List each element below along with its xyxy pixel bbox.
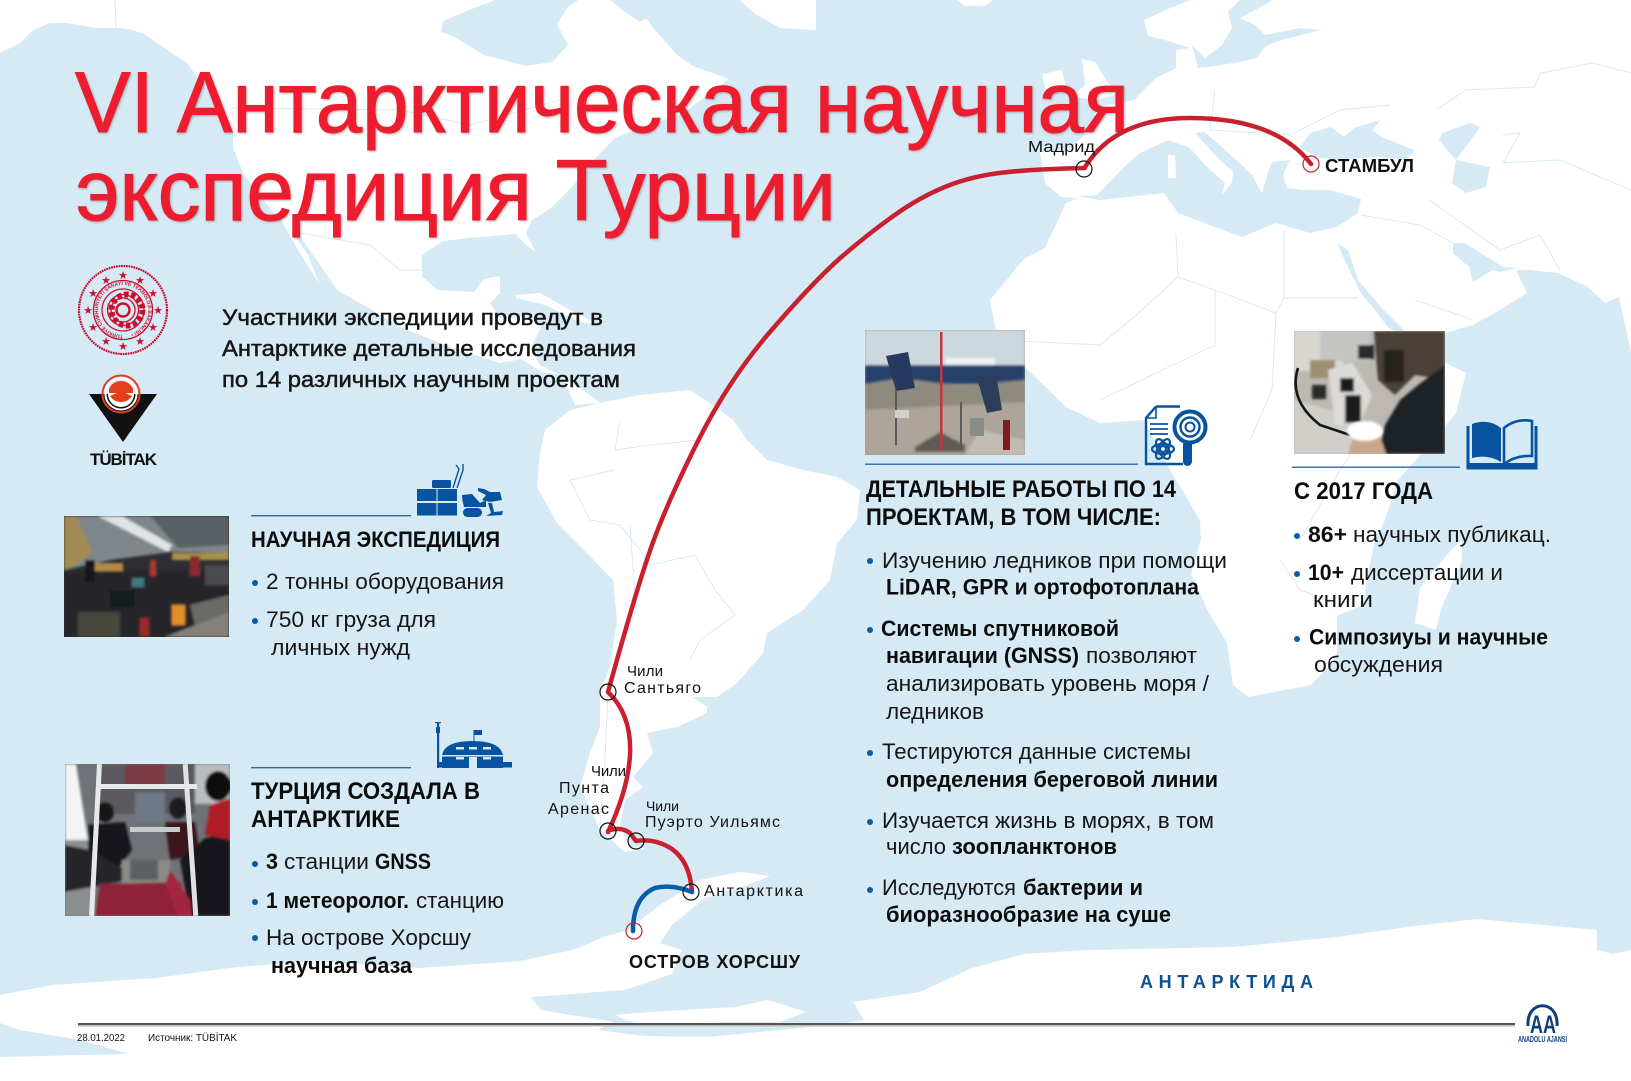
bullet list: ледников [886, 699, 984, 724]
land: Eurasia and Africa [990, 0, 1631, 697]
bullet list [252, 849, 504, 978]
bullet list: 3 [266, 849, 278, 874]
route [600, 118, 1319, 939]
bullet list: 86+ [1308, 522, 1347, 547]
logo: ministry seal [78, 264, 168, 356]
bullet list: Изучается жизнь в морях, в том [882, 808, 1214, 833]
bullet list: GNSS [375, 849, 431, 874]
marker: Madrid [1076, 161, 1092, 177]
source: Источник: TÜBİTAK [148, 1031, 237, 1044]
heading: АНТАРКТИКЕ [251, 806, 400, 833]
map labels: Чили [646, 798, 679, 814]
map labels: Аренас [548, 801, 609, 818]
land: Iceland [957, 0, 993, 6]
route: Santiago to Punta Arenas [608, 692, 630, 832]
bullet list: На острове Хорсшу [266, 925, 471, 950]
rule [251, 767, 411, 768]
land: Madagascar [1415, 540, 1462, 630]
border lines [115, 0, 1631, 825]
date: 28.01.2022 [77, 1033, 125, 1044]
logo: ministry seal: ★ [148, 321, 158, 334]
route: Punta Arenas to Antarctica [608, 829, 692, 892]
panel: since 2017 [1292, 331, 1551, 677]
marker: Santiago [600, 684, 616, 700]
title [75, 55, 1129, 239]
bullet list: навигации (GNSS) [886, 643, 1079, 668]
heading: ДЕТАЛЬНЫЕ РАБОТЫ ПО 14 [866, 476, 1177, 503]
heading: ПРОЕКТАМ, В ТОМ ЧИСЛЕ: [866, 504, 1161, 531]
heading: ТУРЦИЯ СОЗДАЛА В [251, 778, 480, 805]
logo: Anadolu Agency: ANADOLU AJANSI [1518, 1035, 1567, 1044]
sea: Ungava strait [610, 0, 655, 22]
logo: ministry seal: TÜRKİYE CUMHURİYETİ SANAYİ VE TEKNOLOJİ BAKANLIĞI • [94, 281, 152, 338]
logo: ministry seal: ★ [88, 287, 98, 300]
land: North America [0, 0, 729, 405]
intro text [222, 305, 636, 392]
photo: solar panels station [865, 330, 1025, 455]
bullet list: зоопланктонов [952, 834, 1117, 859]
land: Great Britain [1071, 59, 1123, 100]
title: экспедиция Турции [76, 143, 836, 239]
photo: expedition members [65, 764, 231, 916]
bullet list: научная база [271, 953, 413, 978]
heading [866, 476, 1177, 531]
map labels [548, 139, 1414, 992]
intro text: по 14 различных научным проектам [222, 367, 620, 392]
bullet list: число [886, 834, 946, 859]
land: Cuba [516, 293, 600, 325]
map labels: Чили [591, 763, 626, 780]
marker: Antarctica [683, 884, 699, 900]
bullet list: Системы спутниковой [881, 616, 1119, 641]
logo: ministry seal: ★ [88, 321, 98, 334]
logo: ministry seal: ★ [118, 340, 128, 353]
logo: TÜBİTAK: TÜBİTAK [90, 450, 158, 469]
land: Greenland tip [740, 0, 816, 30]
bullet list [252, 569, 504, 660]
bullet list: 1 метеоролог. [266, 888, 409, 913]
map labels: Мадрид [1028, 139, 1096, 156]
bullet list [867, 548, 1227, 927]
bullet list: определения береговой линии [886, 767, 1218, 792]
logo: ministry seal: ★ [101, 274, 111, 287]
bullet list: Симпозиуы и научные [1309, 624, 1548, 650]
heading: С 2017 ГОДА [1294, 478, 1433, 505]
map labels: ОСТРОВ ХОРСШУ [629, 952, 801, 972]
icon: boxes and snowmobile [417, 464, 503, 517]
land: Mediterranean islands [1168, 155, 1176, 178]
intro text: Участники экспедиции проведут в [222, 305, 603, 330]
bullet list: станцию [416, 888, 504, 913]
sea: Mediterranean [1078, 132, 1361, 237]
intro text: Антарктике детальные исследования [222, 336, 636, 361]
sea: Red Sea [1337, 243, 1412, 338]
bullet list: личных нужд [271, 635, 410, 660]
bullet list: Исследуются [882, 875, 1016, 900]
map labels: АНТАРКТИДА [1140, 972, 1313, 992]
bullet list: диссертации и [1351, 560, 1503, 585]
panel: scientific expedition [64, 464, 504, 660]
photo: researcher at microscope [1294, 331, 1445, 454]
bullet list: LiDAR, GPR и ортофотоплана [886, 574, 1200, 600]
route: Madrid to Santiago [608, 168, 1085, 692]
logo: ministry seal: ★ [135, 274, 145, 287]
bullet list: Тестируются данные системы [882, 739, 1191, 764]
icon: document and magnifier [1146, 406, 1206, 466]
sea: Caspian [1439, 123, 1490, 193]
map labels: Сантьяго [624, 680, 701, 697]
bullet list: биоразнообразие на суше [886, 902, 1171, 927]
sea: Black Sea [1300, 120, 1415, 160]
land: ice shelf island [614, 1000, 806, 1025]
heading [251, 778, 480, 833]
sea: Baltic [1192, 0, 1320, 68]
heading: НАУЧНАЯ ЭКСПЕДИЦИЯ [251, 527, 500, 552]
panel: detailed works [865, 330, 1227, 927]
bullet list: Изучению ледников при помощи [882, 548, 1227, 573]
route: Antarctica to Horseshoe Island [633, 887, 692, 931]
logo: Anadolu Agency: AA [1530, 1011, 1556, 1039]
bullet list: 2 тонны оборудования [266, 569, 504, 594]
bullet list: книги [1313, 587, 1373, 612]
sea: Hudson Bay [441, 0, 578, 66]
icon: book [1468, 420, 1536, 468]
bullet list [1294, 522, 1551, 677]
bullet list: бактерии и [1023, 875, 1143, 900]
map labels: Пунта [559, 780, 609, 797]
panel: Turkey in Antarctica [65, 722, 512, 978]
logo: ministry seal: ★ [118, 269, 128, 282]
bullet list: анализировать уровень моря / [886, 671, 1210, 696]
title: VI Антарктическая научная [75, 55, 1129, 151]
marker: Puerto Williams [628, 833, 644, 849]
bullet list: станции [284, 849, 369, 874]
footer [77, 1023, 1515, 1044]
logo: TÜBİTAK [89, 376, 158, 469]
bullet list: обсуждения [1314, 652, 1443, 677]
icon: research base [435, 722, 512, 768]
marker: Horseshoe Island [626, 923, 642, 939]
land: South America [537, 390, 860, 852]
land: Ireland [1042, 70, 1066, 92]
bullet list: 10+ [1308, 560, 1344, 585]
rule [865, 464, 1138, 465]
route: Istanbul to Madrid [1085, 118, 1311, 167]
bullet list: научных публикац. [1353, 522, 1551, 547]
logo: ministry seal: ★ [101, 335, 111, 348]
photo: cargo at airport [64, 516, 229, 637]
map labels: Пуэрто Уильямс [645, 814, 780, 831]
logo: ministry seal: ★ [148, 287, 158, 300]
sea: Persian Gulf [1453, 243, 1517, 282]
map labels: СТАМБУЛ [1325, 156, 1414, 176]
logo: ministry seal: ★ [83, 304, 93, 317]
logo: ministry seal: ★ [135, 335, 145, 348]
logo: Anadolu Agency [1518, 1006, 1567, 1044]
bullet list: 750 кг груза для [266, 607, 436, 632]
marker: Istanbul [1303, 156, 1319, 172]
rule [251, 515, 411, 516]
marker: Punta Arenas [600, 823, 616, 839]
map labels: Антарктика [704, 883, 803, 900]
land: Antarctica [0, 872, 1631, 1081]
rule [1292, 466, 1460, 468]
map labels: Чили [627, 663, 663, 680]
logo: ministry seal: ★ [153, 304, 163, 317]
bullet list: позволяют [1086, 643, 1197, 668]
